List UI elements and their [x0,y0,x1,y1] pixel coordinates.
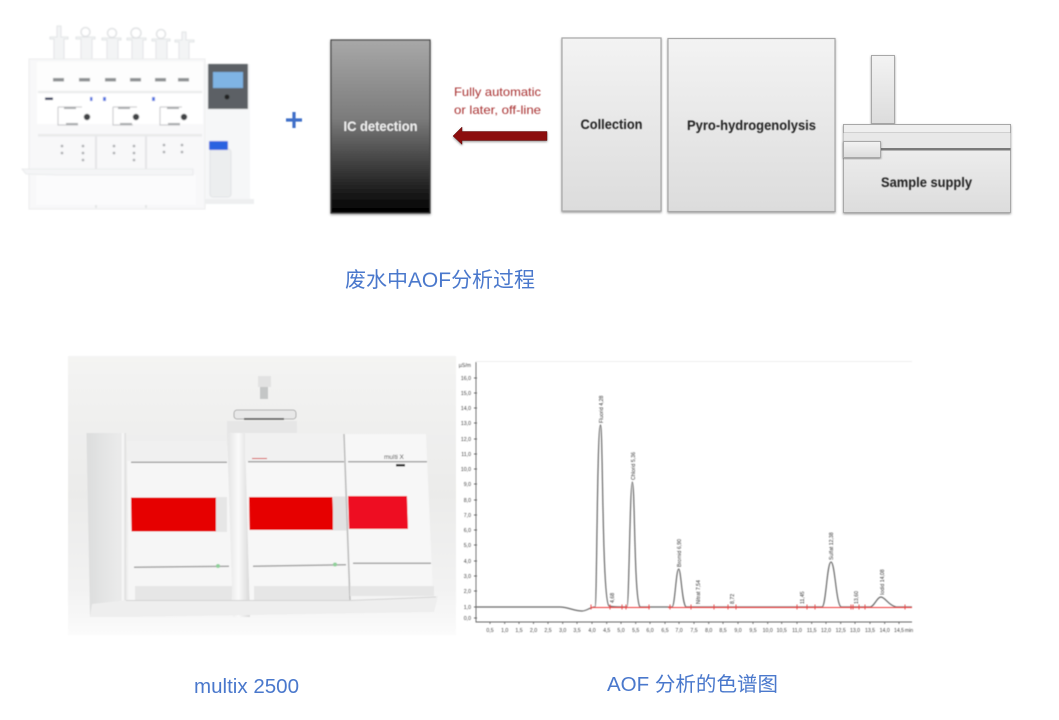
x axis labels: 12,5 [836,628,846,634]
icon: plus sign [286,112,302,128]
caption: AOF analysis process: 废水中AOF分析过程 [345,269,535,292]
y axis [474,362,912,624]
y axis labels [459,363,471,622]
sample tower [258,376,271,387]
shelf [22,169,193,175]
center column [227,433,250,617]
caption: AOF chromatogram: AOF 分析的色谱图 [607,673,778,696]
peak labels: Sulfat 12,38 [829,532,835,560]
x axis labels: 9,0 [734,628,742,634]
x axis labels: 2,0 [530,628,537,634]
syringes [50,26,194,62]
x axis labels: 7,5 [690,628,698,634]
chromatogram [459,361,913,634]
label: fully automatic or later, off-line: or later, off-line [454,103,541,117]
control column [206,64,250,203]
red panel right [348,496,408,529]
bottle [210,149,231,197]
x axis labels: 13,0 [850,628,860,634]
x axis labels: 10,0 [763,628,773,634]
red panel center [249,497,334,530]
y axis labels: 10,0 [461,467,471,473]
frame [29,59,205,209]
IC detection box: IC detection [344,119,418,134]
x axis labels: 1,5 [515,628,523,634]
Pyro-hydrogenolysis box: Pyro-hydrogenolysis [687,117,816,133]
x axis labels: 6,5 [661,628,669,634]
y axis labels: 12,0 [461,437,471,443]
y axis labels: 1,0 [464,605,471,611]
Collection box [562,38,661,211]
y axis labels: 14,0 [461,406,471,412]
x axis labels: 3,0 [559,628,566,634]
x axis labels: 8,5 [719,628,727,634]
label: fully automatic or later, off-line: Fully automatic [454,85,541,99]
base [90,596,438,617]
right module [344,434,433,596]
y axis labels: 5,0 [464,543,471,549]
red panel left [131,498,217,532]
baseline integration red [591,606,912,608]
Sample supply assembly [844,56,1010,212]
Pyro-hydrogenolysis box [668,38,835,212]
y axis labels: 9,0 [464,482,471,488]
x axis labels: 4,0 [588,628,596,634]
model label: multi X [384,454,405,461]
x axis labels: min [905,628,913,634]
peak labels: 13,60 [854,591,860,604]
y axis labels: 0,0 [464,616,471,622]
valves row [53,78,189,82]
signal trace [476,425,912,611]
x axis labels: 12,0 [821,628,831,634]
x axis labels: 3,5 [573,628,581,634]
y axis labels: 4,0 [464,559,471,565]
peak labels: Fluorid 4,28 [599,395,605,423]
y axis labels: 2,0 [464,589,471,595]
label: fully automatic or later, off-line [454,85,541,117]
x axis labels: 14,0 [880,628,890,634]
peak labels: Bromid 6,90 [677,539,683,567]
y axis labels: 3,0 [464,574,471,580]
arrow: red leftward [453,127,547,144]
x axis labels: 0,5 [486,628,494,634]
IC detection box [331,40,430,213]
left module [127,441,235,617]
x axis labels: 11,5 [807,628,817,634]
peak labels: 11,45 [800,591,806,604]
x axis labels [486,628,913,634]
x axis labels: 1,0 [501,628,508,634]
y axis labels: 6,0 [464,528,471,534]
peak labels: Chlorid 5,36 [631,452,637,480]
x axis labels: 4,5 [603,628,610,634]
left side casing [86,433,128,617]
extraction instrument photo [22,26,254,209]
green status lights [216,564,220,568]
small ports [61,144,183,161]
y axis labels: 15,0 [461,391,471,397]
peak labels: 8,72 [730,594,736,604]
Sample supply assembly: Sample supply [881,174,972,190]
x axis labels: 5,0 [617,628,625,634]
pump heads [58,107,182,125]
x axis labels: 14,5 [894,628,904,634]
peak labels: 4,68 [610,593,616,603]
peak labels [599,395,886,604]
x axis labels: 11,0 [792,628,802,634]
y axis labels: 7,0 [464,513,471,519]
caption: multix 2500: multix 2500 [194,676,299,698]
x axis labels: 5,5 [632,628,639,634]
x axis labels: 8,0 [705,628,712,634]
x axis labels: 9,5 [749,628,757,634]
x axis labels: 13,5 [865,628,875,634]
y axis labels: µS/m [459,363,471,369]
y axis labels: 13,0 [461,421,471,427]
x axis labels: 2,5 [544,628,552,634]
y axis labels: 16,0 [461,376,471,382]
center module [245,433,349,617]
x axis labels: 10,5 [777,628,787,634]
peak labels: Iodid 14,08 [880,569,886,595]
y axis labels: 11,0 [461,452,471,458]
Collection box: Collection [580,116,642,132]
x axis labels: 6,0 [646,628,654,634]
multix 2500 instrument photo [68,356,456,635]
peak labels: Nitrat 7,54 [696,580,702,604]
y axis labels: 8,0 [464,498,471,504]
x axis labels: 7,0 [675,628,683,634]
